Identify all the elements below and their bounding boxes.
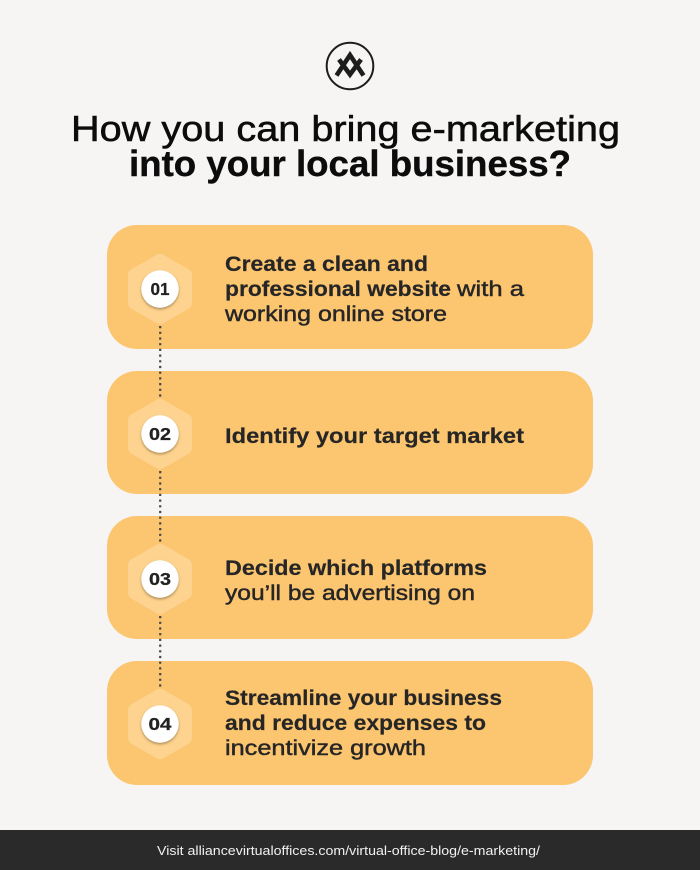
step 3 text: Decide which platforms	[225, 556, 487, 580]
step 4 text: Streamline your business	[225, 686, 502, 710]
step 3 text: you’ll be advertising on	[225, 581, 475, 605]
icon: logo	[327, 43, 373, 89]
badge 04: 04	[148, 714, 172, 734]
badge 02: 02	[149, 424, 171, 444]
step 1 text: working online store	[224, 302, 447, 326]
step 1 text: professional website	[225, 277, 451, 301]
footer	[0, 830, 700, 870]
step 4 text: and reduce expenses to	[225, 711, 486, 735]
badge 03	[128, 544, 192, 614]
badge 02	[128, 399, 192, 469]
title: into your local business?	[129, 143, 571, 184]
panel: step 4	[107, 661, 593, 785]
badge 01	[128, 254, 192, 324]
step 1 text: Create a clean and	[225, 252, 428, 276]
step 2 text: Identify your target market	[225, 424, 524, 448]
title	[71, 108, 620, 184]
title: How you can bring e-marketing	[71, 108, 620, 149]
panel: step 3	[107, 516, 593, 639]
step 1 text: with a	[456, 277, 524, 301]
footer link text: Visit alliancevirtualoffices.com/virtual-office-blog/e-marketing/	[157, 843, 540, 858]
step 3 text	[225, 556, 487, 605]
panel: step 2	[107, 371, 593, 494]
dotted connector 3	[159, 616, 161, 688]
step 1 text	[224, 252, 524, 326]
step 4 text	[225, 686, 502, 760]
badge 03: 03	[149, 569, 171, 589]
panel: step 1	[107, 225, 593, 349]
dotted connector 1	[159, 326, 161, 398]
badge 01: 01	[150, 279, 170, 299]
dotted connector 2	[159, 471, 161, 543]
badge 04	[128, 689, 192, 759]
step 4 text: incentivize growth	[225, 736, 426, 760]
